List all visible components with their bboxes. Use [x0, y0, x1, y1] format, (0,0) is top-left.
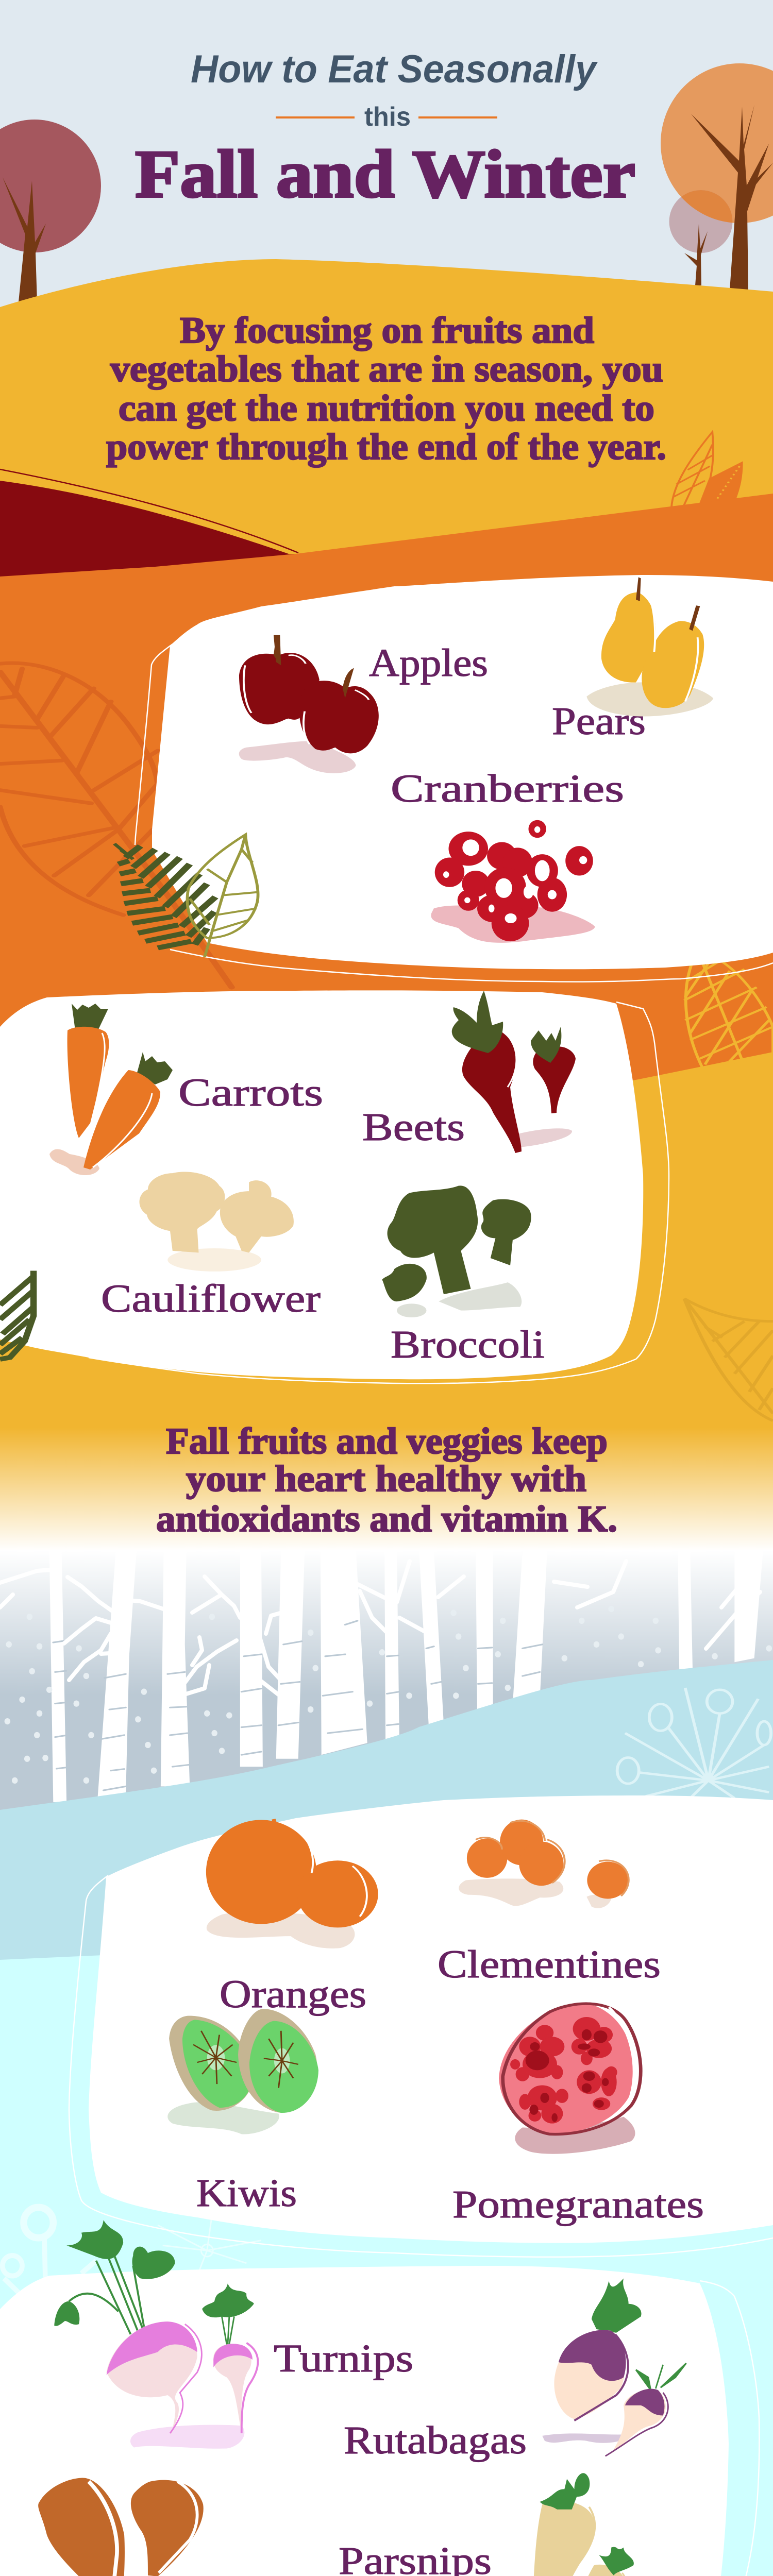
right autumn trees: [661, 63, 773, 290]
snowflake top right: [617, 1688, 771, 1798]
label: Kiwis: Kiwis: [196, 2172, 297, 2215]
snowy birch trees: [0, 1550, 772, 1802]
icy blue hill: [0, 1660, 773, 1963]
intro text: power through the end of the year.: [106, 426, 666, 467]
label: Beets: Beets: [362, 1106, 465, 1149]
decorative orange leaves on yellow hill: [671, 432, 742, 508]
label: Turnips: Turnips: [274, 2337, 413, 2380]
closing text: fall: antioxidants and vitamin K.: [156, 1498, 617, 1539]
label: Cranberries: Cranberries: [391, 767, 624, 810]
panel shape: [0, 990, 643, 1379]
icon: pears: [586, 577, 713, 717]
background leaf watermark: [0, 663, 232, 987]
closing text: fall: [156, 1420, 617, 1539]
label: Pomegranates: Pomegranates: [452, 2183, 704, 2226]
label: Carrots: Carrots: [178, 1071, 323, 1114]
icon: kiwis: [167, 2009, 318, 2134]
winter forest background: [0, 1551, 773, 1819]
panel: winter fruits: [69, 1795, 773, 2257]
lattice leaf right: [684, 951, 773, 1068]
faint leaf on yellow right: [684, 1299, 773, 1421]
label: Rutabagas: Rutabagas: [344, 2419, 527, 2462]
closing text: fall: Fall fruits and veggies keep: [166, 1420, 608, 1462]
label: Broccoli: Broccoli: [391, 1323, 545, 1366]
intro text: [106, 310, 666, 467]
dark green leaf at left edge: [0, 1270, 33, 1359]
label: Pears: Pears: [552, 700, 646, 743]
yellow autumn hill with fade to white: [0, 259, 773, 1556]
icon: rutabagas: [542, 2278, 686, 2456]
panel outline: [135, 644, 773, 982]
heading divider: this: this: [364, 102, 411, 132]
panel: fall fruits: [135, 575, 773, 982]
icon: turnips: [54, 2220, 258, 2449]
icon: beets: [452, 991, 576, 1153]
panel: winter vegetables: [0, 2266, 759, 2576]
icon: clementines: [459, 1820, 629, 1908]
icon: parsnips: [482, 2473, 634, 2576]
icon: pomegranate: [499, 2003, 641, 2154]
panel: fall vegetables: [0, 990, 669, 1383]
panel outline: [89, 1002, 669, 1383]
small snowflakes behind panels: [3, 2207, 261, 2294]
icon: oranges: [206, 1819, 378, 1948]
panel shape: [152, 575, 773, 969]
icon: apples: [239, 635, 379, 773]
intro text: By focusing on fruits and: [180, 310, 594, 351]
pale cyan ground: [0, 1955, 773, 2576]
label: Apples: Apples: [369, 641, 488, 685]
intro text: can get the nutrition you need to: [119, 387, 654, 429]
heading: How to Eat Seasonally: How to Eat Seasonally: [191, 47, 598, 91]
icon: sweet potatoes: [38, 2478, 204, 2576]
dark green hatched leaf: [114, 844, 215, 948]
olive outlined leaf: [187, 835, 259, 957]
panel shape: [89, 1795, 773, 2243]
panel shape: [0, 2266, 729, 2576]
left autumn tree: [0, 120, 101, 302]
panel outline: [69, 1875, 773, 2257]
closing text: fall: your heart healthy with: [186, 1458, 586, 1499]
icon: cranberries: [431, 820, 595, 943]
icon: cauliflower: [139, 1172, 294, 1272]
background: sky: [0, 0, 773, 371]
icon: carrots: [49, 1004, 173, 1175]
intro text: vegetables that are in season, you: [110, 348, 663, 389]
label: Cauliflower: Cauliflower: [101, 1277, 321, 1320]
label: Oranges: Oranges: [220, 1973, 366, 2016]
panel outline: [89, 2281, 759, 2576]
label: Clementines: Clementines: [438, 1943, 661, 1986]
maroon hill: [0, 481, 296, 580]
title: Fall and Winter: Fall and Winter: [135, 136, 635, 212]
icon: broccoli: [382, 1185, 531, 1317]
orange band: [0, 494, 773, 1195]
maroon hill contour line: [0, 469, 298, 553]
